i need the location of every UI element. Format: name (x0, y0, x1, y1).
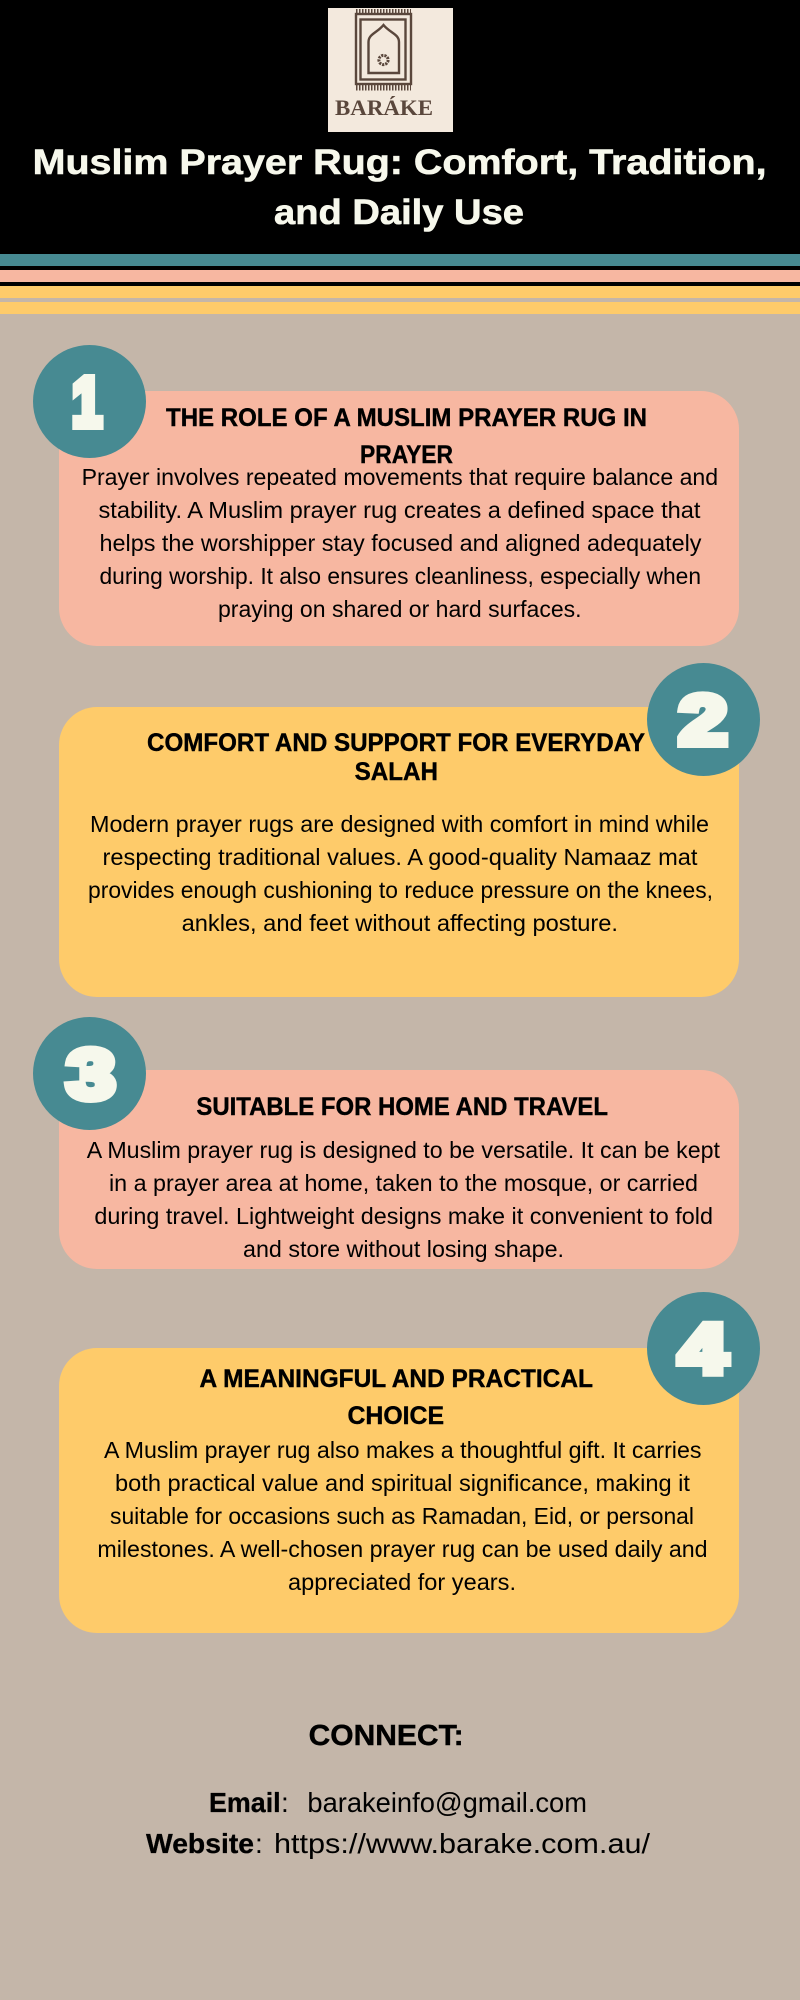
panel 2 body text: ankles, and feet without affecting posture. (182, 910, 618, 936)
panel 2 heading (147, 729, 645, 786)
website line: https://www.barake.com.au/ (274, 1828, 650, 1859)
email line: barakeinfo@gmail.com (307, 1787, 587, 1818)
panel 1 body text: Prayer involves repeated movements that require balance and (82, 464, 718, 490)
panel 4: meaningful choice (59, 1292, 760, 1633)
panel 2 body text: respecting traditional values. A good-quality Namaaz mat (102, 844, 698, 870)
panel 4 body text: suitable for occasions such as Ramadan, Eid, or personal (110, 1503, 694, 1529)
panel 4 body text: milestones. A well-chosen prayer rug can be used daily and (97, 1536, 708, 1562)
panel 4 body text: appreciated for years. (288, 1569, 516, 1595)
panel 4 body text (97, 1437, 708, 1595)
website line (146, 1828, 650, 1859)
colour stripes (0, 254, 800, 314)
email line: Email (209, 1787, 281, 1818)
logo: Baráke prayer rug: BARÁKE (335, 95, 433, 120)
panel 3 body text: A Muslim prayer rug is designed to be versatile. It can be kept (87, 1137, 720, 1163)
panel 4 body text: A Muslim prayer rug also makes a thoughtful gift. It carries (104, 1437, 702, 1463)
title (33, 143, 767, 232)
panel 1 body text: stability. A Muslim prayer rug creates a defined space that (98, 497, 701, 523)
panel 1: role of a prayer rug (33, 345, 739, 646)
panel 2 heading: SALAH (355, 758, 438, 786)
panel 4 heading: CHOICE (348, 1402, 444, 1430)
website line: Website (146, 1828, 254, 1859)
panel 1 body text: helps the worshipper stay focused and aligned adequately (100, 530, 702, 556)
number badge 4 (647, 1292, 760, 1405)
panel 1 background (59, 391, 739, 646)
website line: : (255, 1828, 263, 1859)
panel 2 body text: Modern prayer rugs are designed with comfort in mind while (90, 811, 709, 837)
panel 3 body text: and store without losing shape. (243, 1236, 564, 1262)
panel 3 body text: during travel. Lightweight designs make it convenient to fold (94, 1203, 713, 1229)
panel 4 background (59, 1348, 739, 1633)
panel 1 heading: PRAYER (360, 441, 453, 469)
panel 3 body text: in a prayer area at home, taken to the mosque, or carried (109, 1170, 698, 1196)
header band (0, 0, 800, 254)
number badge 3: 3 (67, 1035, 115, 1113)
number badge 1 (33, 345, 146, 458)
number badge 2 (647, 663, 760, 776)
panel 3 background (59, 1070, 739, 1269)
panel 3 heading: SUITABLE FOR HOME AND TRAVEL (196, 1093, 608, 1121)
panel 2 body text: provides enough cushioning to reduce pressure on the knees, (88, 877, 713, 903)
panel 3 body text (87, 1137, 720, 1262)
panel 2 background (59, 707, 739, 997)
panel 1 body text: during worship. It also ensures cleanliness, especially when (100, 563, 701, 589)
connect section (146, 1720, 650, 1859)
panel 1 body text: praying on shared or hard surfaces. (218, 596, 582, 622)
panel 4 heading: A MEANINGFUL AND PRACTICAL (200, 1365, 593, 1393)
title: Muslim Prayer Rug: Comfort, Tradition, (33, 143, 767, 182)
number badge 4: 4 (679, 1310, 727, 1388)
logo: Baráke prayer rug (328, 8, 453, 132)
panel 1 heading: THE ROLE OF A MUSLIM PRAYER RUG IN (166, 404, 647, 432)
panel 1 body text (82, 464, 718, 622)
panel 3: home and travel (33, 1017, 739, 1269)
panel 2 body text (88, 811, 713, 936)
number badge 3 (33, 1017, 146, 1130)
panel 2: comfort and support (59, 663, 760, 997)
number badge 1: 1 (72, 363, 102, 441)
panel 4 body text: both practical value and spiritual significance, making it (115, 1470, 690, 1496)
panel 2 heading: COMFORT AND SUPPORT FOR EVERYDAY (147, 729, 645, 757)
panel 1 heading (166, 404, 647, 469)
connect heading: CONNECT: (309, 1720, 464, 1752)
panel 4 heading (200, 1365, 593, 1430)
title: and Daily Use (274, 193, 524, 232)
email line: : (281, 1787, 289, 1818)
number badge 2: 2 (679, 681, 727, 759)
